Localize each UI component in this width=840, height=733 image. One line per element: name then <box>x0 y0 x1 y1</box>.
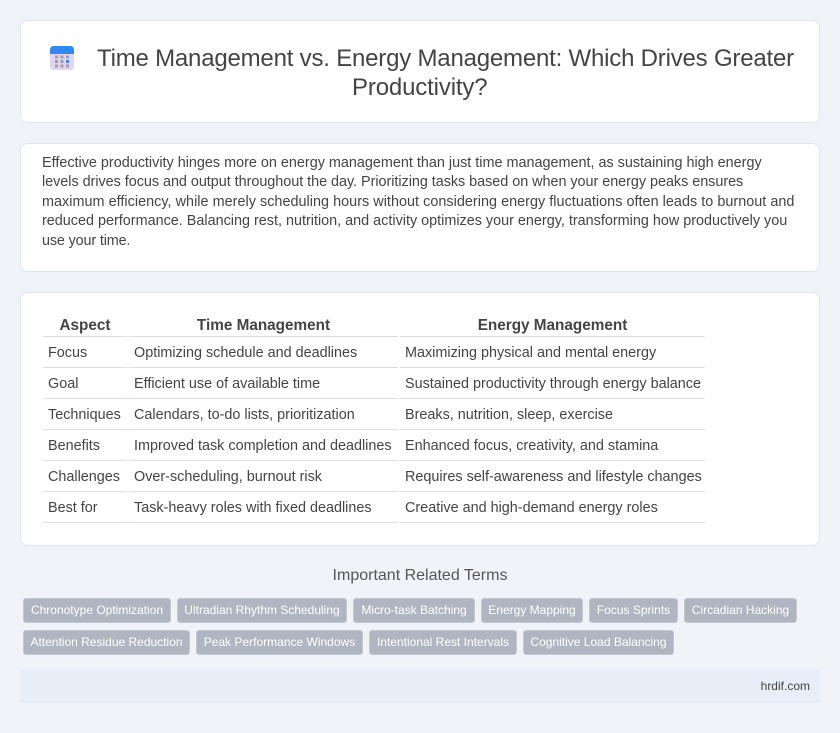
panel: title card <box>20 20 820 123</box>
tag <box>369 630 517 655</box>
text block: introduction paragraph <box>42 155 794 249</box>
row: Best for: Best for <box>48 500 98 516</box>
table header: Aspect <box>59 317 110 334</box>
title: Productivity? <box>352 74 487 101</box>
tag list: related terms <box>23 598 797 655</box>
row: Focus: Focus <box>48 345 87 361</box>
tag <box>23 598 171 623</box>
row: Techniques: Calendars, to-do lists, prioritization <box>134 407 355 423</box>
tag: Peak Performance Windows <box>204 635 355 649</box>
row: Challenges: Requires self-awareness and lifestyle changes <box>405 469 702 485</box>
footer source label: hrdif.com <box>761 679 810 693</box>
row: Techniques <box>43 407 705 430</box>
panel: comparison table card <box>20 292 820 546</box>
row: Challenges: Over-scheduling, burnout risk <box>134 469 322 485</box>
title: Time Management vs. Energy Management: Which Drives Greater <box>97 45 794 72</box>
tag <box>481 598 583 623</box>
tag <box>196 630 363 655</box>
row: Techniques: Breaks, nutrition, sleep, exercise <box>405 407 613 423</box>
table header: Time Management <box>197 317 330 334</box>
row: Goal: Goal <box>48 376 78 392</box>
text block: introduction paragraph: maximum efficiency, while merely scheduling hours without considering energy fluctuations often leads to burnout and <box>42 194 794 210</box>
comparison table <box>43 317 705 523</box>
tag <box>353 598 475 623</box>
tag <box>23 630 190 655</box>
row: Benefits: Improved task completion and deadlines <box>134 438 392 454</box>
heading: important related terms: Important Related Terms <box>333 567 507 584</box>
text block: introduction paragraph: reduced performance. Balancing rest, nutrition, and activity optimizes your energy, transforming how productively you <box>42 213 787 229</box>
tag: Circadian Hacking <box>692 603 789 617</box>
table header <box>43 317 705 337</box>
text block: introduction paragraph: levels drives focus and output throughout the day. Prioritizing tasks based on when your energy peaks ensures <box>42 174 743 190</box>
icon: calendar <box>50 46 74 70</box>
footer <box>20 669 820 703</box>
tag: Ultradian Rhythm Scheduling <box>184 603 340 617</box>
panel: introduction <box>20 143 820 272</box>
row: Goal: Sustained productivity through energy balance <box>405 376 701 392</box>
tag <box>684 598 797 623</box>
row: Challenges: Challenges <box>48 469 120 485</box>
row: Goal: Efficient use of available time <box>134 376 320 392</box>
row: Benefits <box>43 438 705 461</box>
tag <box>523 630 674 655</box>
row: Best for: Creative and high-demand energy roles <box>405 500 658 516</box>
row: Focus: Optimizing schedule and deadlines <box>134 345 357 361</box>
row: Focus <box>43 345 705 368</box>
row: Focus: Maximizing physical and mental energy <box>405 345 656 361</box>
row: Goal <box>43 376 705 399</box>
tag: Micro-task Batching <box>361 603 467 617</box>
table header: Energy Management <box>478 317 627 334</box>
tag: Energy Mapping <box>488 603 576 617</box>
tag <box>589 598 678 623</box>
row: Benefits: Benefits <box>48 438 100 454</box>
title <box>97 45 794 101</box>
row: Benefits: Enhanced focus, creativity, and stamina <box>405 438 658 454</box>
row: Best for: Task-heavy roles with fixed deadlines <box>134 500 372 516</box>
text block: introduction paragraph: use your time. <box>42 233 130 249</box>
tag <box>177 598 347 623</box>
row: Best for <box>43 500 705 523</box>
row: Techniques: Techniques <box>48 407 121 423</box>
tag: Attention Residue Reduction <box>30 635 183 649</box>
row: Challenges <box>43 469 705 492</box>
text block: introduction paragraph: Effective productivity hinges more on energy management than just time management, as sustaining high energy <box>42 155 762 171</box>
tag: Intentional Rest Intervals <box>377 635 509 649</box>
tag: Chronotype Optimization <box>31 603 163 617</box>
tag: Focus Sprints <box>597 603 670 617</box>
tag: Cognitive Load Balancing <box>530 635 667 649</box>
